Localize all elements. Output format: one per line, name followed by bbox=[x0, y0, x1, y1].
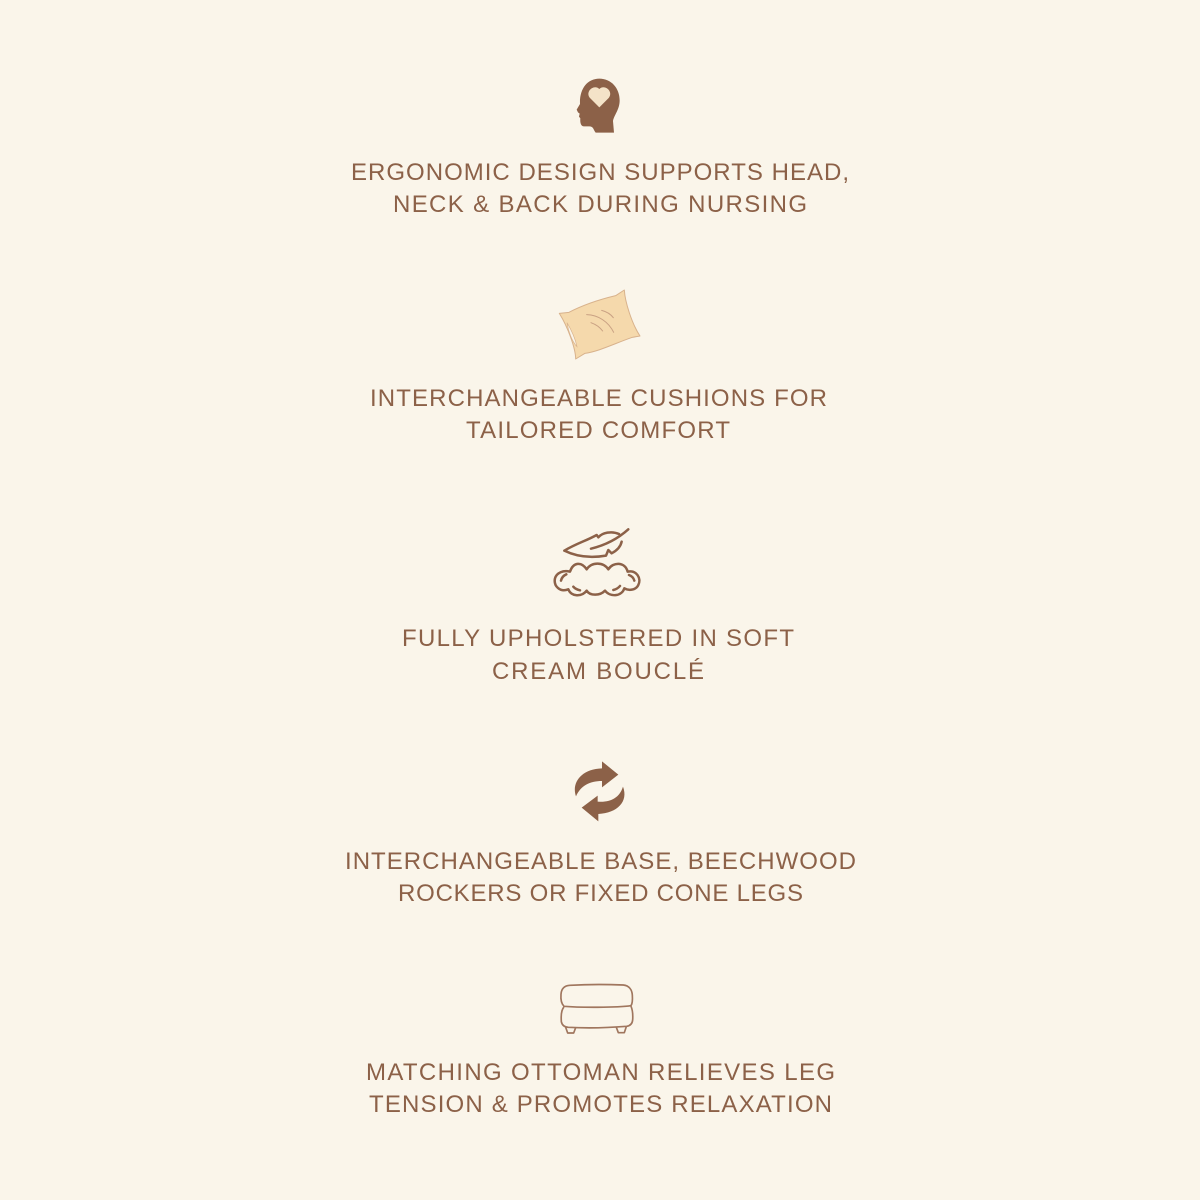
text: interchangeable base: ROCKERS OR FIXED CONE LEGS bbox=[398, 880, 803, 907]
text: matching ottoman bbox=[366, 1059, 835, 1118]
text: interchangeable cushions bbox=[370, 385, 827, 444]
text: fully upholstered: FULLY UPHOLSTERED IN SOFT bbox=[402, 625, 794, 652]
text: ergonomic design: NECK & BACK DURING NURSING bbox=[393, 191, 807, 218]
text: fully upholstered bbox=[402, 625, 794, 685]
text: matching ottoman: MATCHING OTTOMAN RELIEVES LEG bbox=[366, 1059, 835, 1086]
text: ergonomic design bbox=[351, 159, 849, 218]
text: interchangeable base bbox=[345, 848, 856, 907]
text: interchangeable cushions: TAILORED COMFORT bbox=[466, 417, 730, 444]
text: ergonomic design: ERGONOMIC DESIGN SUPPORTS HEAD, bbox=[351, 159, 849, 186]
icon: pillow bbox=[559, 290, 640, 359]
feather bbox=[564, 529, 628, 557]
icon: ottoman bbox=[561, 985, 633, 1033]
text: interchangeable cushions: INTERCHANGEABLE CUSHIONS FOR bbox=[370, 385, 827, 412]
text: fully upholstered: CREAM BOUCLÉ bbox=[492, 658, 704, 685]
icon: swap arrows bbox=[575, 761, 624, 821]
icon: head with heart bbox=[577, 79, 620, 133]
icon: feather and cloud bbox=[555, 529, 639, 595]
text: interchangeable base: INTERCHANGEABLE BASE, BEECHWOOD bbox=[345, 848, 856, 875]
cloud bbox=[555, 564, 639, 595]
text: matching ottoman: TENSION & PROMOTES RELAXATION bbox=[369, 1091, 832, 1118]
